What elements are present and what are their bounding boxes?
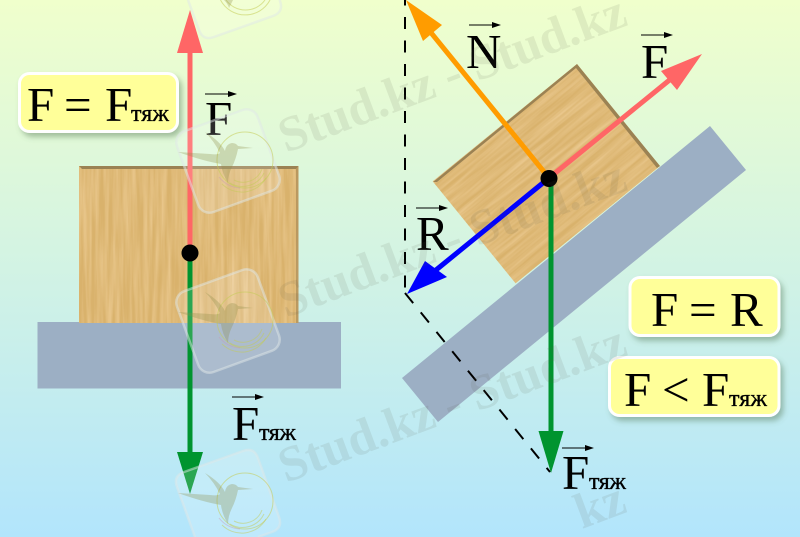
formula box: F < Fтяж: <	[662, 362, 690, 417]
formula box: F = R	[630, 278, 779, 337]
label: gravity vector right: тяж	[589, 469, 626, 495]
label: N vector: N	[466, 24, 501, 79]
formula box: F < Fтяж	[610, 358, 779, 417]
label: gravity vector right: F	[562, 445, 589, 500]
left floor	[38, 322, 341, 388]
right arrow: N	[406, 0, 549, 178]
left wooden block	[79, 166, 298, 323]
left arrow: gravity down	[177, 252, 203, 494]
formula box: F = R: R	[730, 282, 763, 337]
left arrow: F up	[177, 10, 203, 252]
right arrow: R	[407, 178, 549, 294]
left point	[182, 244, 198, 262]
formula box: F = Fтяж	[20, 74, 178, 132]
formula box: F < Fтяж: F	[702, 362, 729, 417]
right arrow: gravity	[538, 178, 564, 473]
right arrow: F	[549, 54, 702, 178]
right point	[540, 170, 558, 187]
watermark logos	[173, 0, 283, 537]
watermark text	[270, 0, 633, 537]
label: F vector right: F	[641, 34, 668, 89]
label: gravity vector right	[562, 445, 626, 500]
formula box: F = R: =	[689, 282, 717, 337]
watermark text: Stud.kz - Stud.kz	[270, 312, 633, 493]
formula box: F < Fтяж: F	[624, 362, 651, 417]
tilted wooden block	[433, 64, 660, 283]
formula box: F < Fтяж: тяж	[729, 386, 767, 412]
label: gravity vector left: F	[232, 396, 259, 451]
formula box: F = Fтяж: F	[27, 77, 54, 132]
formula box: F = R: F	[651, 282, 678, 337]
label: F vector left: F	[205, 91, 232, 146]
inclined plane	[402, 126, 746, 422]
label: gravity vector left: тяж	[259, 420, 296, 446]
watermark text: Stud.kz - Stud.kz	[270, 147, 633, 328]
formula box: F = Fтяж: F	[105, 77, 132, 132]
formula box: F = Fтяж: =	[64, 77, 92, 132]
formula box: F = Fтяж: тяж	[131, 101, 169, 127]
label: gravity vector left	[232, 394, 296, 451]
dashed construction lines	[405, 0, 550, 472]
label: R vector: R	[416, 206, 449, 261]
